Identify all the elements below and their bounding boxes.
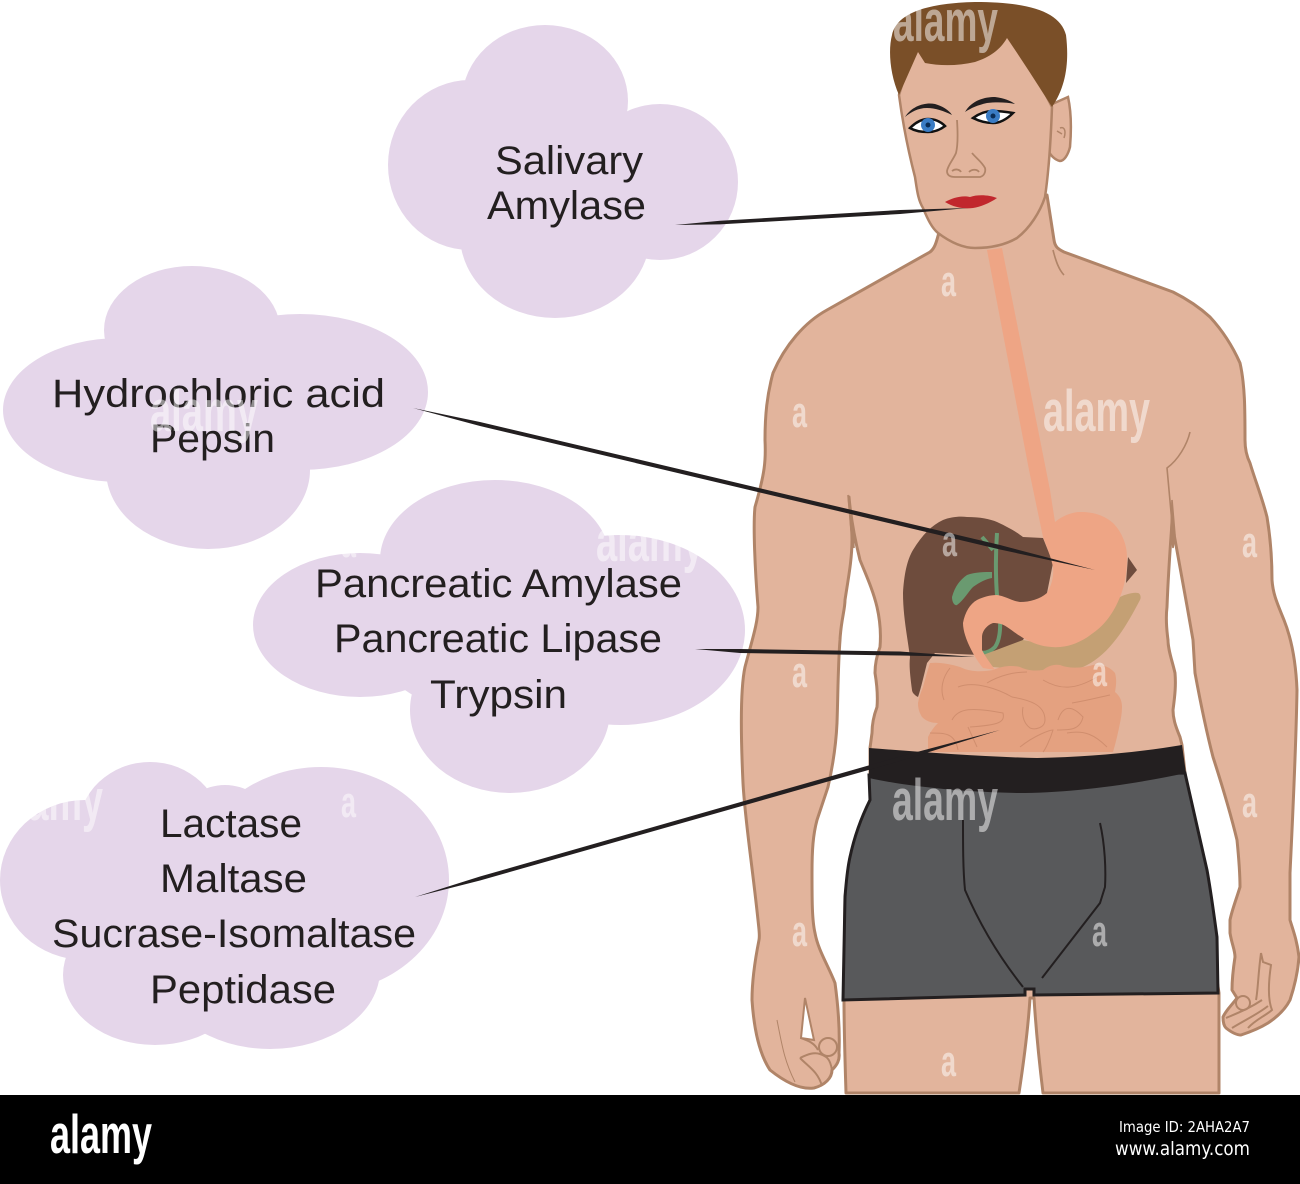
text: intestinal enzymes: Sucrase-Isomaltase xyxy=(52,912,416,956)
text: intestinal enzymes xyxy=(52,802,416,1012)
pancreas xyxy=(983,593,1141,672)
panel: intestinal enzymes cloud xyxy=(0,762,449,1049)
footer image id: Image ID: 2AHA2A7 xyxy=(1119,1118,1250,1136)
watermarks: a xyxy=(941,257,956,306)
small intestine xyxy=(918,663,1122,752)
watermarks: a xyxy=(942,517,957,566)
head: face xyxy=(899,25,1052,248)
cloud shape: pancreatic xyxy=(253,480,745,793)
hair xyxy=(890,2,1067,107)
gallbladder and bile duct xyxy=(952,533,1000,653)
watermarks: alamy xyxy=(596,509,704,574)
text: intestinal enzymes: Maltase xyxy=(160,857,307,901)
leader line: mouth xyxy=(675,208,968,225)
boxer shorts xyxy=(843,745,1218,1000)
fly seams xyxy=(963,820,1105,987)
watermarks: alamy xyxy=(892,768,998,833)
footer logo: alamy xyxy=(50,1103,152,1165)
organs xyxy=(903,248,1141,752)
leader line: pancreas xyxy=(695,649,975,657)
text: salivary amylase: Amylase xyxy=(487,184,646,228)
watermarks: alamy xyxy=(0,768,103,833)
watermarks: a xyxy=(341,778,356,827)
left eye xyxy=(910,118,945,132)
text: salivary amylase xyxy=(487,139,646,228)
watermarks: a xyxy=(341,518,356,567)
left eyebrow xyxy=(905,104,952,117)
watermarks: alamy xyxy=(150,379,258,444)
waistband xyxy=(869,745,1186,793)
footer website: www.alamy.com xyxy=(1115,1138,1250,1160)
text: pancreatic enzymes: Pancreatic Lipase xyxy=(334,617,662,661)
left hand fingers xyxy=(777,998,837,1086)
watermarks: alamy xyxy=(1043,379,1150,444)
nose xyxy=(947,120,985,177)
armpit and chest creases xyxy=(848,250,1190,548)
watermarks: a xyxy=(1242,518,1257,567)
right hand fingers xyxy=(1226,953,1272,1028)
watermarks: a xyxy=(792,388,807,437)
text: hydrochloric acid and pepsin: Pepsin xyxy=(150,417,275,461)
watermarks: a xyxy=(941,1037,956,1086)
lips xyxy=(945,195,997,208)
footer bar xyxy=(0,1095,1300,1184)
leader line: small intestine xyxy=(415,730,1000,897)
oesophagus and stomach xyxy=(963,248,1127,670)
text: pancreatic enzymes: Trypsin xyxy=(430,673,567,717)
right eye xyxy=(973,109,1013,123)
watermarks: a xyxy=(1092,647,1107,696)
watermarks: a xyxy=(1092,907,1107,956)
text: pancreatic enzymes xyxy=(315,562,682,717)
right eyebrow xyxy=(965,97,1015,112)
panel: pancreatic enzymes cloud xyxy=(253,480,745,793)
body silhouette xyxy=(741,195,1299,1093)
watermarks: a xyxy=(792,648,807,697)
cloud shape: salivary xyxy=(388,25,738,318)
panel: salivary amylase cloud xyxy=(388,25,738,318)
watermarks: a xyxy=(1242,778,1257,827)
panel: stomach secretions cloud xyxy=(3,266,428,549)
shorts body xyxy=(843,773,1218,1000)
cloud shape: intestinal xyxy=(0,762,449,1049)
spleen xyxy=(1126,557,1137,583)
text: hydrochloric acid and pepsin xyxy=(52,372,385,461)
watermarks: a xyxy=(792,907,807,956)
leader line: stomach xyxy=(413,408,1095,570)
text: intestinal enzymes: Lactase xyxy=(160,802,302,846)
cloud shape: stomach xyxy=(3,266,428,549)
ear xyxy=(1048,97,1071,161)
text: salivary amylase: Salivary xyxy=(495,139,643,183)
text: hydrochloric acid and pepsin: Hydrochloric acid xyxy=(52,372,385,416)
human figure xyxy=(741,2,1299,1093)
text: pancreatic enzymes: Pancreatic Amylase xyxy=(315,562,682,606)
text: intestinal enzymes: Peptidase xyxy=(150,968,336,1012)
liver xyxy=(903,517,1053,697)
